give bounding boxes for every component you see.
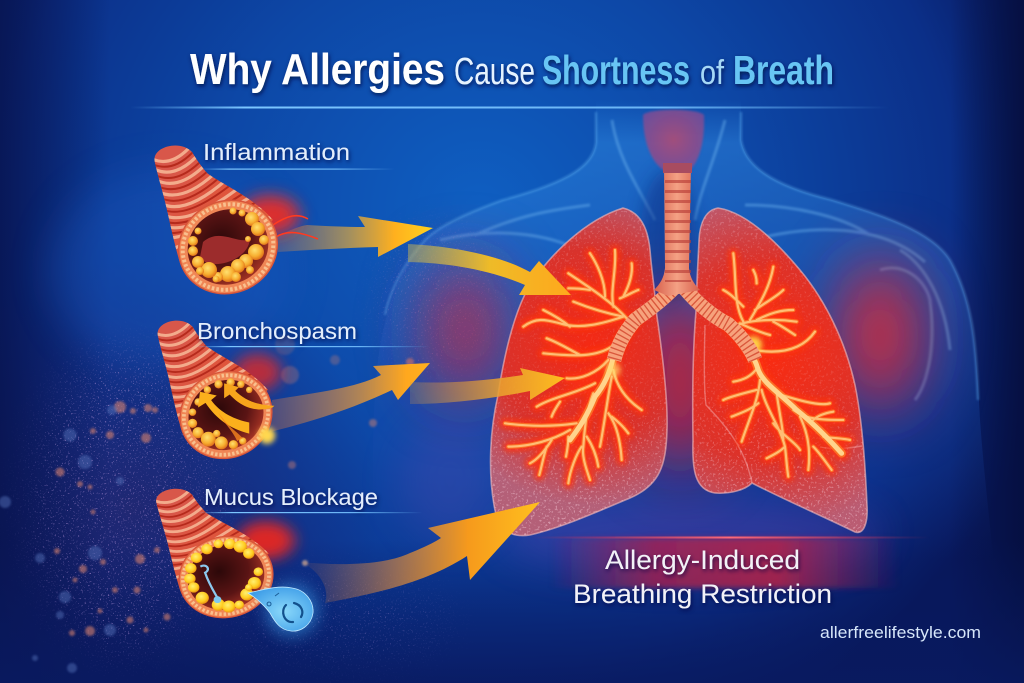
main bronchi	[614, 285, 755, 360]
red glow	[237, 521, 294, 560]
right lung	[693, 208, 867, 532]
throat and larynx	[643, 110, 704, 170]
label: bronchospasm: Bronchospasm	[197, 318, 357, 344]
bronchial tree	[505, 250, 850, 483]
lung tissue texture	[480, 200, 880, 540]
tissue folds	[200, 236, 250, 264]
arrow: inflammation lower	[408, 244, 571, 295]
label: mucus blockage: Mucus Blockage	[204, 484, 378, 510]
caption: Allergy-Induced	[605, 545, 800, 575]
title	[190, 45, 834, 94]
title: Cause	[454, 51, 535, 93]
swollen tissue	[188, 208, 269, 282]
particles and dust, lower left	[0, 213, 514, 678]
caption	[573, 545, 832, 609]
title: Why Allergies	[190, 45, 445, 94]
glow of branches	[505, 250, 850, 483]
label: inflammation: Inflammation	[203, 139, 350, 165]
red banner behind caption	[530, 536, 930, 588]
arrow: bronchospasm lower	[410, 368, 565, 404]
orange branches	[505, 250, 850, 483]
title: Shortness	[542, 47, 690, 93]
swollen tissue	[188, 378, 253, 449]
left lung	[491, 208, 667, 536]
mucus deposits	[184, 539, 263, 613]
red glow	[233, 354, 282, 391]
website: allerfreelifestyle.com	[820, 623, 981, 642]
arrow: inflammation upper	[278, 216, 433, 257]
highlight branches	[505, 250, 850, 483]
red glow behind lungs	[425, 260, 920, 470]
airway: bronchospasm	[155, 321, 286, 473]
title: of	[700, 54, 724, 92]
trachea	[654, 164, 700, 296]
airway: mucus blockage	[154, 489, 294, 632]
human torso silhouette	[373, 100, 1000, 640]
airway: inflammation	[152, 146, 318, 310]
caption: Breathing Restriction	[573, 579, 832, 609]
right bright spot	[745, 336, 762, 354]
arrow: mucus blockage	[300, 502, 540, 603]
mucus droplet icon	[248, 584, 318, 636]
strand of mucus	[200, 566, 218, 600]
title: Breath	[733, 47, 834, 93]
spasm arrows inside airway	[198, 392, 249, 434]
arrow: bronchospasm upper	[270, 363, 430, 432]
red inflammation glow	[240, 195, 300, 235]
